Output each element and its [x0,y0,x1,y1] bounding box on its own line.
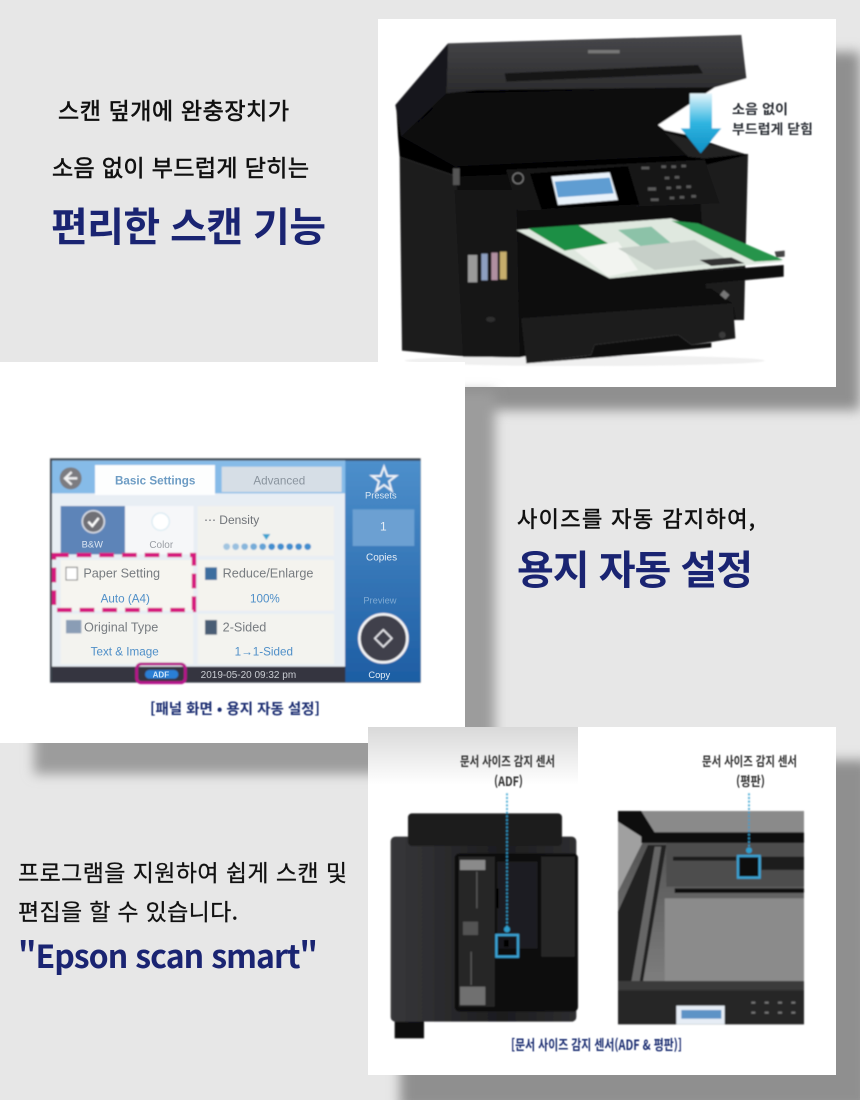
text: scan cover line 2: 소음 없이 부드럽게 닫히는 [52,149,309,183]
screen labels: ADF [153,670,169,679]
screen labels: Basic Settings [115,475,195,488]
screen labels: Original Type [84,620,158,634]
heading: automatic paper setting: 용지 자동 설정 [517,538,753,596]
sensor markers [504,793,509,928]
control panel [506,160,720,211]
dashed highlight [54,555,194,610]
screen labels: Paper Setting [83,567,160,581]
sensor labels: (ADF) [494,771,523,790]
screen labels: 1 [380,520,387,534]
sensor photos [391,793,804,1038]
caption: sensors: [문서 사이즈 감지 센서(ADF & 평판)] [511,1035,682,1055]
touch screen [50,458,421,683]
screen labels: Advanced [253,475,305,488]
panel: document size sensors [368,727,836,1075]
ink tank windows [468,255,477,282]
callout: soft close: 부드럽게 닫힘 [732,118,813,138]
text: auto-detect line: 사이즈를 자동 감지하여, [517,502,755,534]
screen labels: Auto (A4) [101,592,150,605]
screen labels: Text & Image [91,646,159,659]
screen labels: 2019-05-20 09:32 pm [201,670,296,681]
paper cassette [518,288,736,320]
text block: paper size [517,502,755,596]
output tray with paper [518,243,571,297]
screen labels: B&W [82,539,103,549]
text: program line 2: 편집을 할 수 있습니다. [18,893,238,927]
panel shadow: sensors [400,760,860,1100]
screen labels: Color [149,540,174,551]
sensor labels: (평판) [736,771,765,790]
flatbed view [618,811,804,1024]
panel: touch panel screen [0,362,465,743]
panel: printer photo [378,19,836,387]
sensor labels [460,751,797,790]
text block: scan smart [18,854,347,978]
panel shadow: printer [420,52,860,410]
heading: Epson scan smart: "Epson scan smart" [18,932,318,978]
sensor labels: 문서 사이즈 감지 센서 [460,751,555,770]
screen labels: 100% [250,592,280,605]
screen labels: Preview [363,595,397,605]
text: program line 1: 프로그램을 지원하여 쉽게 스캔 및 [18,854,347,888]
printer illustration [395,35,785,366]
heading block: scan cover [51,92,326,253]
screen labels: Copies [366,553,397,564]
arrow: soft close [681,93,721,153]
screen labels [82,475,397,681]
screen labels: Copy [368,670,390,680]
panel shadow: touch panel [34,392,495,774]
callout: soft close [732,98,813,138]
screen labels: ⋯ Density [204,513,259,527]
screen labels: 1→1-Sided [235,646,293,659]
text: scan cover line 1: 스캔 덮개에 완충장치가 [58,92,289,126]
screen labels: Presets [365,491,397,501]
screen labels: Reduce/Enlarge [223,567,313,581]
heading: convenient scan: 편리한 스캔 기능 [51,195,326,253]
sensor labels: 문서 사이즈 감지 센서 [702,751,797,770]
caption: panel screen: [패널 화면 • 용지 자동 설정] [150,698,320,719]
ADF top view [395,1018,424,1038]
callout: soft close: 소음 없이 [732,98,788,118]
screen labels: 2-Sided [223,620,266,634]
